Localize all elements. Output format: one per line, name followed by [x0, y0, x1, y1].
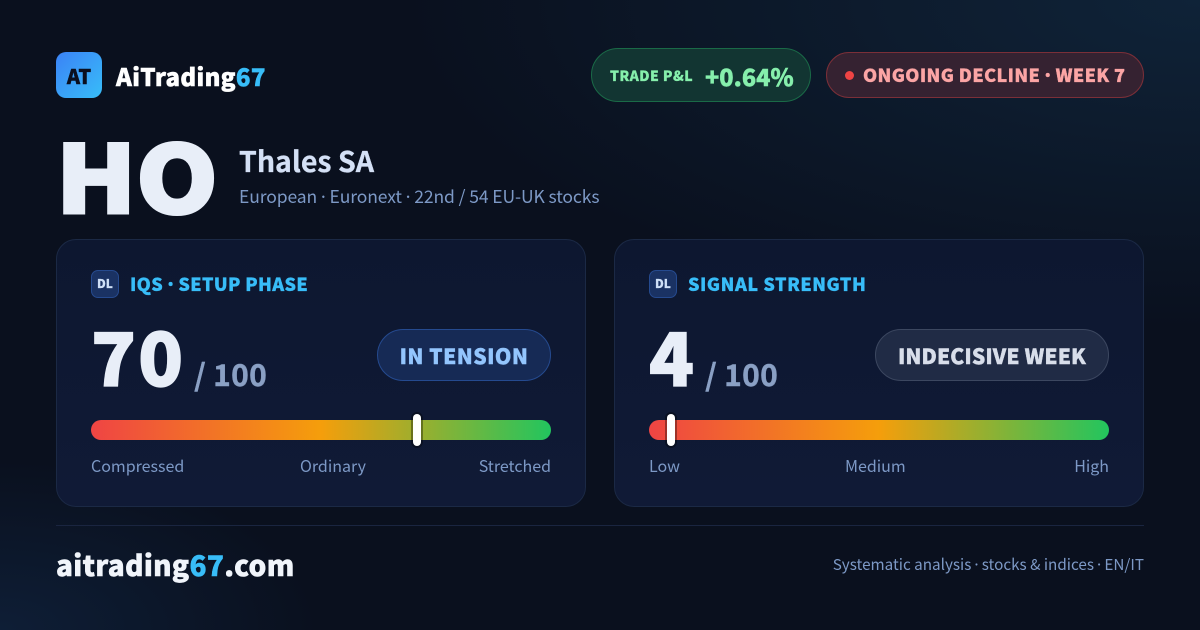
scale label mid: Medium	[845, 453, 906, 477]
scale label low: Compressed	[91, 453, 184, 477]
pill: trade P&L	[591, 48, 811, 102]
badge	[649, 270, 677, 298]
pill: trade P&L: TRADE P&L	[610, 66, 693, 86]
badge: DL	[97, 275, 113, 292]
pill: trade P&L: +0.64%	[705, 59, 794, 93]
status pill	[377, 329, 551, 381]
score: 4 / 100	[649, 301, 778, 408]
badge	[91, 270, 119, 298]
scale label low: Low	[649, 453, 680, 477]
status pill	[875, 329, 1109, 381]
score: 70 / 100	[91, 301, 267, 408]
brand name: AiTrading67	[116, 58, 266, 93]
gauge bar	[649, 420, 1109, 440]
status pill: IN TENSION	[400, 341, 528, 371]
logo icon: AT	[67, 61, 91, 90]
panel title: IQS · SETUP PHASE	[130, 271, 308, 297]
gauge bar	[91, 420, 551, 440]
pill: ongoing decline	[826, 52, 1144, 98]
panel: IQS setup phase	[56, 239, 586, 507]
logo icon	[56, 52, 102, 98]
gauge marker	[667, 414, 675, 446]
company details: European · Euronext · 22nd / 54 EU-UK stocks	[239, 184, 599, 209]
pill: ongoing decline: ONGOING DECLINE · WEEK 7	[863, 62, 1125, 88]
panel: signal strength	[614, 239, 1144, 507]
company name: Thales SA	[239, 140, 374, 181]
badge: DL	[655, 275, 671, 292]
panel title: SIGNAL STRENGTH	[688, 271, 866, 297]
scale label mid: Ordinary	[300, 453, 366, 477]
footer site url: aitrading67.com	[56, 545, 295, 585]
footer tagline: Systematic analysis · stocks & indices · EN/IT	[833, 553, 1144, 575]
ticker: HO	[56, 105, 218, 240]
status pill: INDECISIVE WEEK	[898, 341, 1086, 371]
scale label high: Stretched	[479, 453, 551, 477]
gauge marker	[413, 414, 421, 446]
scale label high: High	[1074, 453, 1109, 477]
